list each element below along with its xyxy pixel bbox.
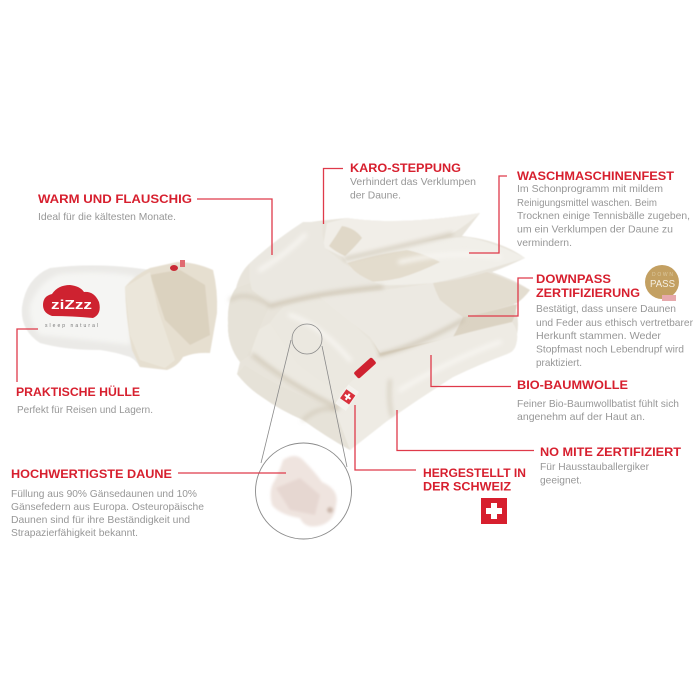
connector: no mite <box>397 410 534 450</box>
top flap <box>249 222 382 305</box>
connector: praktische huelle <box>17 329 38 382</box>
text: praktische huelle: Perfekt für Reisen und Lagern. <box>17 404 153 416</box>
text: waschmaschinenfest: Trocknen einige Tennisbälle zugeben, <box>517 210 690 222</box>
connector: bio-baumwolle <box>431 355 511 386</box>
text: hochwertigste daune: Daunen sind für ihre Beständigkeit und <box>11 514 190 526</box>
logo: ziZzz cloud: ziZzz <box>51 297 93 312</box>
text: karo-steppung: der Daune. <box>350 190 401 202</box>
connector: karo-steppung <box>324 168 343 224</box>
text: waschmaschinenfest: Im Schonprogramm mit mildem <box>517 183 663 195</box>
text: downpass zertifizierung: Bestätigt, dass unsere Daunen <box>536 303 676 315</box>
icon: downpass badge <box>645 265 679 301</box>
text: downpass zertifizierung: ZERTIFIZIERUNG <box>536 288 640 300</box>
text: waschmaschinenfest: vermindern. <box>517 237 572 249</box>
text: no mite zertifiziert: geeignet. <box>540 474 582 486</box>
text: hochwertigste daune: Füllung aus 90% Gänsedaunen und 10% <box>11 488 197 500</box>
text: waschmaschinenfest <box>517 171 690 249</box>
text: no mite zertifiziert: Für Hausstauballergiker <box>540 461 649 473</box>
text: karo-steppung: KARO-STEPPUNG <box>350 163 461 175</box>
icon: red tag on duvet <box>353 357 377 379</box>
magnifier: down detail <box>256 324 352 539</box>
icon: swiss flag <box>481 498 507 524</box>
text: hergestellt in der schweiz: HERGESTELLT IN <box>423 468 526 480</box>
text: warm und flauschig: Ideal für die kältesten Monate. <box>38 211 176 223</box>
text: bio-baumwolle: Feiner Bio-Baumwollbatist fühlt sich <box>517 398 679 410</box>
middle left layer <box>250 323 340 408</box>
text: hochwertigste daune <box>11 469 204 539</box>
text: hochwertigste daune: Gänsefedern aus Europa. Osteuropäische <box>11 501 204 513</box>
illustration: folded duvet <box>228 213 530 450</box>
connector: waschmaschinenfest <box>469 176 507 253</box>
text: downpass zertifizierung: Stopfmast noch Lebendrupf wird <box>536 344 684 356</box>
text: downpass zertifizierung: DOWNPASS <box>536 274 611 286</box>
front panel <box>270 298 378 393</box>
text: hergestellt in der schweiz <box>423 468 526 494</box>
illustration: down feather cluster <box>271 456 337 526</box>
text: karo-steppung: Verhindert das Verklumpen <box>350 176 476 188</box>
text: downpass zertifizierung: praktiziert. <box>536 357 582 369</box>
connector: downpass <box>468 278 533 316</box>
icon: downpass badge: PASS <box>650 279 675 290</box>
second pillow <box>343 237 525 285</box>
text: bio-baumwolle: angenehm auf der Haut an. <box>517 411 645 423</box>
third layer <box>320 272 530 353</box>
text: bio-baumwolle: BIO-BAUMWOLLE <box>517 380 628 392</box>
icon: downpass badge: DOWN <box>652 272 673 278</box>
text: waschmaschinenfest: um ein Verklumpen der Daune zu <box>517 224 673 236</box>
illustration: packed duvet roll <box>22 260 217 370</box>
text: hergestellt in der schweiz: DER SCHWEIZ <box>423 482 511 494</box>
icon: small red tags on roll <box>170 260 185 271</box>
text: praktische huelle <box>16 386 153 416</box>
bottom layer left <box>237 365 350 450</box>
text: warm und flauschig <box>38 194 192 223</box>
text: karo-steppung <box>350 163 476 202</box>
bottom layer right <box>335 322 517 450</box>
text: no mite zertifiziert: NO MITE ZERTIFIZIERT <box>540 447 681 459</box>
silhouette <box>228 213 530 450</box>
logo: ziZzz cloud: sleep natural <box>45 323 98 329</box>
left lumps <box>228 283 270 362</box>
text: hochwertigste daune: Strapazierfähigkeit bekannt. <box>11 527 138 539</box>
text: downpass zertifizierung: Herkunft stammen. Weder <box>536 330 662 342</box>
top pillow <box>323 213 480 257</box>
logo: ziZzz cloud <box>43 285 100 329</box>
text: praktische huelle: PRAKTISCHE HÜLLE <box>16 386 140 399</box>
connector: warm und flauschig <box>197 199 272 255</box>
fold shadows <box>230 234 500 420</box>
text: downpass zertifizierung <box>536 274 693 369</box>
text: downpass zertifizierung: und Feder aus ethisch vertretbarer <box>536 317 693 329</box>
text: waschmaschinenfest: WASCHMASCHINENFEST <box>517 171 674 183</box>
connector: hergestellt <box>355 405 416 470</box>
connector: hochwertigste daune <box>178 472 286 474</box>
text: warm und flauschig: WARM UND FLAUSCHIG <box>38 194 192 206</box>
text: no mite zertifiziert <box>540 447 681 486</box>
text: bio-baumwolle <box>517 380 679 423</box>
text: hochwertigste daune: HOCHWERTIGSTE DAUNE <box>11 469 172 481</box>
text: waschmaschinenfest: Reinigungsmittel waschen. Beim <box>517 197 657 209</box>
beige inner fold <box>372 304 517 356</box>
icon: swiss tag on duvet <box>335 385 359 411</box>
